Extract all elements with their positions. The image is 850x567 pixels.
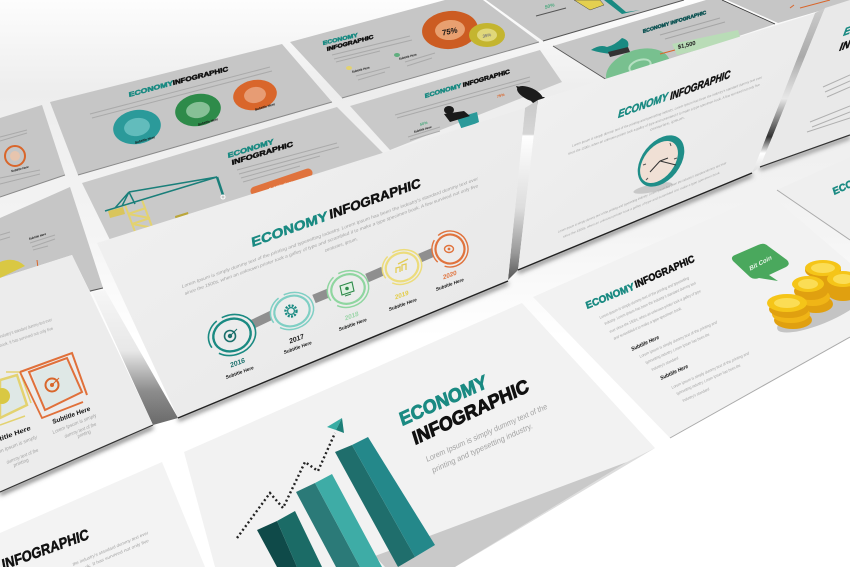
panel: bitcoin slide: Lorem Ipsum is simply dummy text of the printing and	[639, 319, 718, 359]
callout: Bit Coin bubble	[732, 244, 789, 281]
panel: 75 percent slide: Subtitle Here	[352, 65, 370, 74]
panel: money bag slide: ECONOMY INFOGRAPHIC	[643, 10, 707, 35]
step 2020	[427, 226, 473, 293]
text: subtitle right	[52, 405, 98, 440]
step 2018: Subtitle Here	[339, 317, 368, 333]
step 2017	[265, 287, 319, 356]
text: subtitle left	[0, 425, 39, 469]
step 2019	[377, 244, 427, 313]
panel: scale slide: 50%	[545, 2, 555, 11]
button: orange pill: Subtitle Here	[269, 179, 293, 192]
panel: bitcoin slide: Lorem Ipsum is simply dummy text of the printing and	[671, 350, 750, 390]
panel: far left slide with orange circle	[0, 105, 65, 197]
step 2018: 2018	[344, 310, 359, 322]
panel: three circles slide: ECONOMY	[128, 80, 174, 99]
text: subtitle right: printing	[77, 429, 92, 440]
step 2017: Subtitle Here	[283, 340, 313, 356]
panel: bitcoin slide	[533, 193, 850, 438]
panel: bitcoin slide: and scrambled it to make a type specimen book.	[613, 305, 683, 341]
fold shadow	[375, 462, 627, 567]
text: subtitle right: Subtitle Here	[52, 405, 91, 426]
icon: gold coins	[767, 260, 850, 340]
text block: since the 1500s, when an unknown printer took a galley of type and scrambled it to make a type specimen book. A few survived not only five	[185, 183, 479, 296]
icon: clock	[628, 126, 694, 196]
shadows under standing panels	[0, 137, 850, 494]
panel: clock slide: since the 1500s, when an unknown printer took a galley of type and scrambled it to make a type specimen book. A few survived not only five	[568, 83, 760, 156]
title: INFOGRAPHIC	[410, 376, 532, 450]
panel: podium slide: 75%	[497, 92, 505, 99]
step 2017: 2017	[289, 333, 305, 346]
panel: bitcoin slide: typesetting industry. Lorem Ipsum has been the	[645, 331, 711, 365]
icon: yellow square	[0, 372, 31, 425]
text: subtitle right: Lorem Ipsum is simply	[52, 413, 98, 436]
panel: bottom left slide	[0, 462, 205, 567]
panel: clock slide	[518, 13, 815, 270]
panel: central timeline slide	[97, 108, 525, 418]
step 2016: 2016	[230, 357, 246, 370]
panel: bitcoin slide: industry. Lorem Ipsum has been the industry's standard dummy text	[604, 280, 697, 326]
panel: left slide with yellow chart	[0, 187, 103, 292]
panel: money bag slide	[553, 0, 775, 99]
panel: crane slide	[82, 107, 385, 245]
panel: bitcoin slide: typesetting industry. Lorem Ipsum has been the	[676, 362, 742, 396]
gap between left and centre standing panels	[92, 290, 178, 425]
panel: three circles slide: INFOGRAPHIC	[172, 66, 229, 87]
panel: clock slide: INFOGRAPHIC	[670, 68, 731, 103]
panel: 75 percent slide: 75%	[442, 25, 458, 38]
panel: clock slide: Lorem Ipsum is simply dummy text of the printing and typesetting industry. Lorem Ipsum has been the industry's standard dummy text ever	[558, 161, 727, 234]
connectors	[253, 252, 434, 324]
title: ECONOMY	[397, 372, 490, 431]
text: subtitle left: m Ipsum is simply	[0, 434, 38, 455]
icon: crane	[105, 177, 225, 245]
panel: bitcoin slide: INFOGRAPHIC	[634, 254, 696, 291]
panel: 75 percent slide: 35%	[482, 32, 491, 39]
panel: 75 percent slide: ECONOMY	[323, 33, 359, 47]
panel: 75 percent slide: INFOGRAPHIC	[327, 35, 374, 53]
callout: Bit Coin bubble: Bit Coin	[749, 254, 772, 273]
panel: right edge slide	[777, 157, 850, 240]
panel: crane slide: INFOGRAPHIC	[231, 141, 293, 167]
bar chart	[257, 437, 435, 567]
panel: three circles slide: Subtitle Here	[135, 135, 155, 145]
dotted trend line	[237, 433, 335, 538]
icon: orange square with target	[20, 353, 87, 418]
panel: clock slide: since the 1500s, when an unknown printer took a galley of type and scrambled it to make a type specimen book.	[563, 170, 721, 239]
panel: bitcoin slide: industry's standard.	[651, 355, 680, 372]
gap between centre and clock panels	[508, 100, 538, 280]
callout: price box: $1,500	[678, 41, 697, 51]
arrow head	[327, 418, 344, 433]
heading	[251, 175, 422, 250]
panel: bars cover slide	[184, 303, 655, 567]
panel: podium slide: ECONOMY	[425, 83, 462, 100]
text block: Lorem Ipsum is simply dummy text of the printing and typesetting industry. Lorem Ipsum has been the industry's standard dummy text ever	[182, 176, 479, 289]
panel: standing slide with squares: industry's standard dummy text ever	[0, 317, 53, 339]
panel: bitcoin slide: industry's standard.	[682, 386, 711, 403]
panel: left slide with yellow chart: Subtitle Here	[29, 232, 47, 241]
panel: 75 percent slide	[290, 0, 539, 98]
text block: printing and typesetting industry.	[431, 421, 534, 475]
gap between clock and right panels	[752, 8, 825, 173]
heading: INFOGRAPHIC	[329, 175, 422, 222]
step 2019: 2019	[395, 289, 409, 301]
panel: bitcoin slide: Lorem Ipsum is simply dummy text of the printing and typesetting	[599, 275, 689, 320]
panel: 75 percent slide: Subtitle Here	[399, 52, 417, 61]
panel: clock slide: centuries, ipsum.	[650, 115, 685, 132]
panel: podium slide	[350, 50, 562, 150]
panel: right standing slide	[760, 0, 850, 167]
heading: ECONOMY	[251, 208, 329, 250]
text block: Lorem Ipsum is simply dummy text of the	[425, 402, 549, 464]
panel: bitcoin slide: ECONOMY	[585, 281, 636, 312]
panel: bitcoin slide: Subtitle Here	[631, 335, 660, 353]
panel: clock slide: ECONOMY	[618, 90, 670, 121]
icon: money bag	[591, 38, 676, 99]
panel: three circles slide: Subtitle Here	[255, 102, 275, 112]
panel: standing slide with squares: book. It has survived not only five	[0, 326, 54, 348]
panel: far left slide with orange circle: Subtitle Here	[11, 165, 29, 173]
panel: three circles slide: Subtitle Here	[198, 117, 218, 127]
step 2018	[322, 265, 374, 333]
icon: speaker at podium	[444, 106, 479, 130]
text block: centuries, ipsum.	[325, 236, 358, 253]
panel: podium slide: Subtitle Here	[414, 125, 432, 134]
step 2020: Subtitle Here	[436, 277, 464, 293]
panel: top right slide	[727, 0, 850, 23]
text: subtitle right: dummy text of the	[64, 421, 97, 440]
panel: bitcoin slide: Subtitle Here	[660, 364, 689, 382]
step 2020: 2020	[443, 269, 457, 281]
panel: standing slide with squares	[0, 255, 153, 492]
step 2016	[203, 308, 261, 381]
step 2016: Subtitle Here	[225, 365, 255, 381]
panel: podium slide: INFOGRAPHIC	[463, 69, 511, 89]
callout: price box	[660, 30, 741, 55]
panel: crane slide: ECONOMY	[227, 139, 274, 160]
panel: bitcoin slide: ever since the 1500s, when an unknown printer took a galley of type	[609, 288, 702, 334]
icon: black rocket	[515, 83, 545, 106]
text: subtitle left: dummy text of the	[6, 447, 39, 466]
button: orange pill	[255, 173, 308, 192]
panel: bottom left slide: the industry's standard dummy text ever	[72, 530, 149, 567]
panel: podium slide: 50%	[420, 120, 428, 127]
panel: scale slide	[486, 0, 684, 41]
text: subtitle left: printing	[13, 457, 30, 469]
panel: clock slide: Lorem Ipsum is simply dummy text of the printing and typesetting industry. Lorem Ipsum has been the industry's standard dummy text ever	[572, 75, 763, 148]
panel: three circles slide	[50, 44, 332, 175]
step 2019: Subtitle Here	[389, 297, 417, 313]
